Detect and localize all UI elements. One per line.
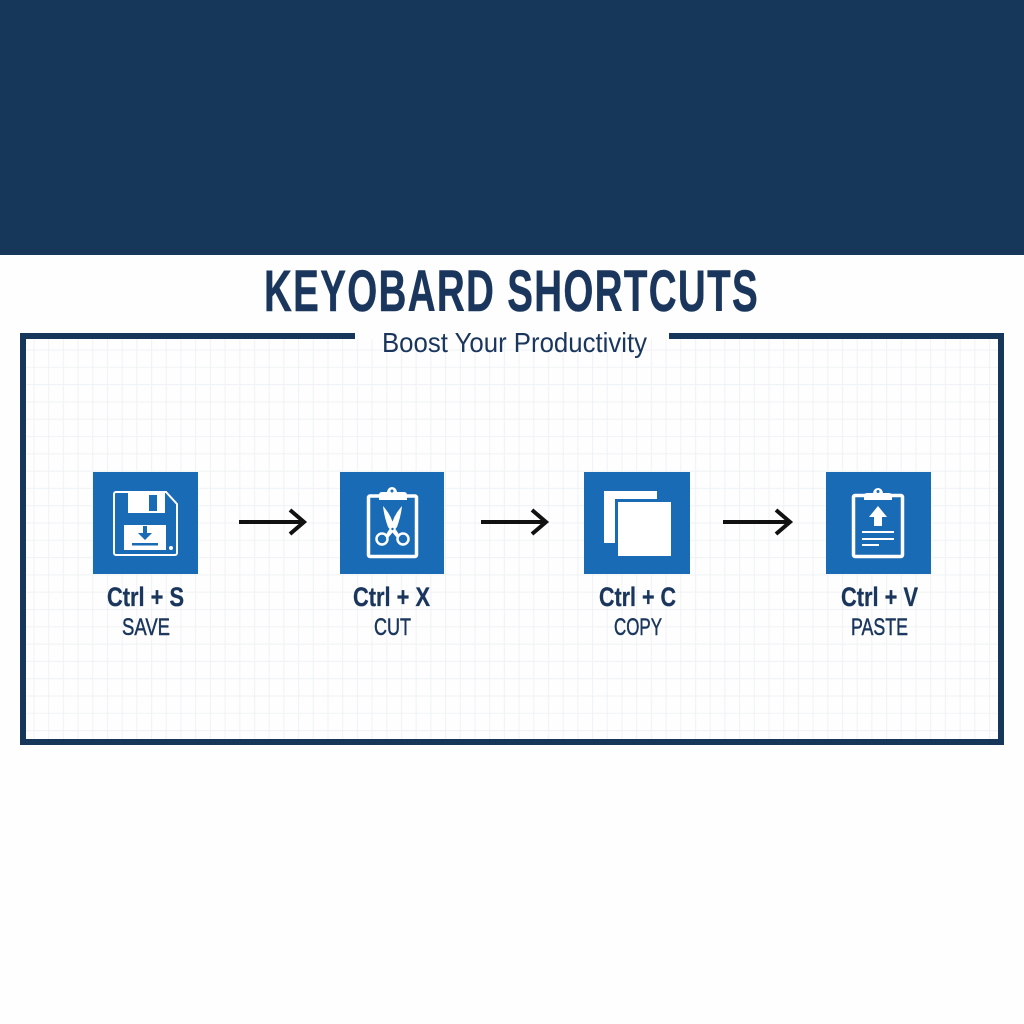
shortcut keys: Ctrl + X [353, 582, 430, 612]
arrow: save to cut [239, 510, 304, 534]
action label: COPY [614, 614, 662, 641]
title: KEYOBARD SHORTCUTS [264, 259, 759, 324]
shortcut: paste [826, 472, 931, 641]
action label: PASTE [851, 614, 908, 641]
icon: floppy disk [93, 472, 198, 574]
icon: copy pages [584, 472, 690, 574]
icon: clipboard with up arrow [826, 472, 931, 574]
panel grid background [26, 339, 998, 739]
top banner [0, 0, 1024, 255]
icon: clipboard with scissors [340, 472, 444, 574]
panel frame [23, 336, 1001, 742]
arrow: copy to paste [723, 510, 790, 534]
action label: CUT [374, 614, 411, 641]
shortcut keys: Ctrl + C [599, 582, 676, 612]
shortcut: copy [584, 472, 690, 641]
shortcut keys: Ctrl + S [107, 582, 184, 612]
arrow: cut to copy [481, 510, 546, 534]
panel: shortcuts [23, 327, 1001, 742]
subtitle: Boost Your Productivity [382, 327, 647, 358]
shortcut keys: Ctrl + V [841, 582, 918, 612]
shortcut: save [93, 472, 198, 641]
action label: SAVE [122, 614, 170, 641]
shortcut: cut [340, 472, 444, 641]
